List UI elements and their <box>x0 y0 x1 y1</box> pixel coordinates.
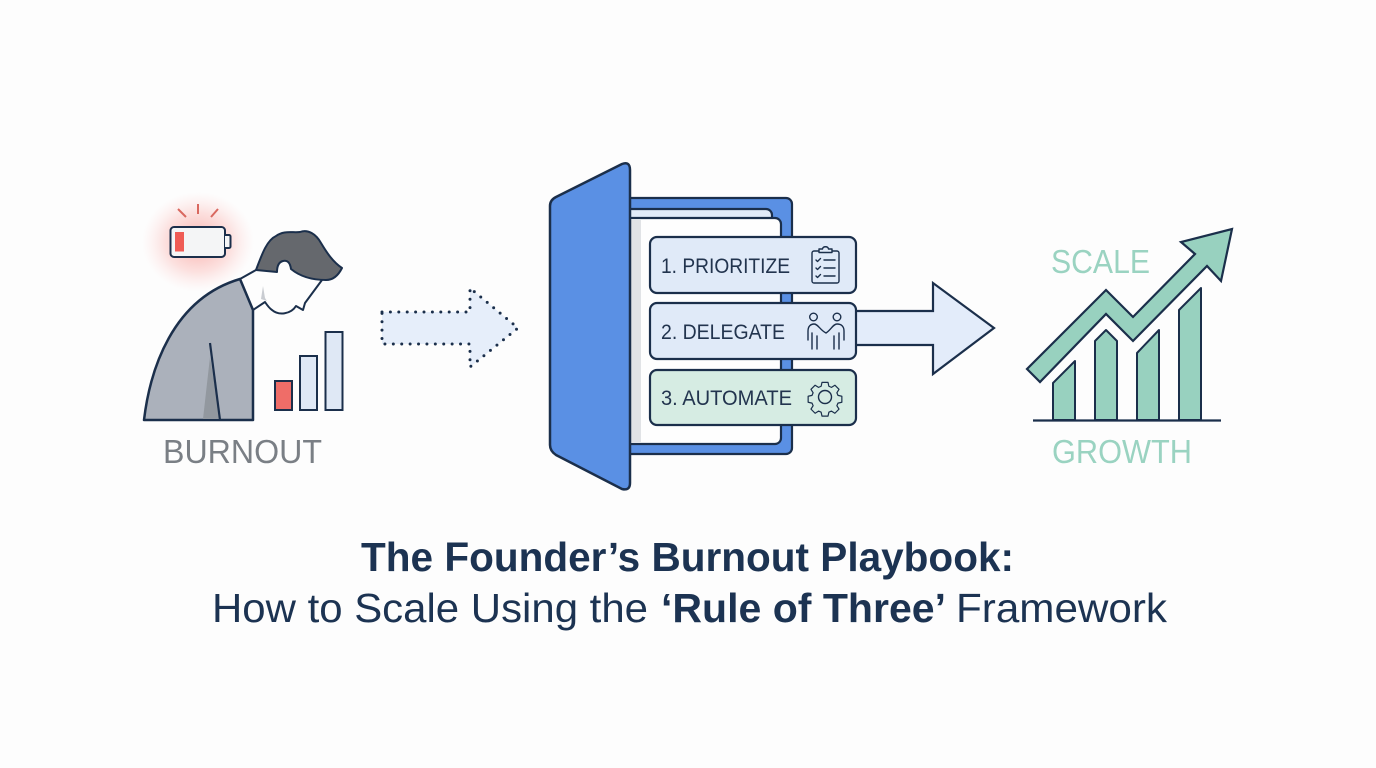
icon: exhausted founder <box>144 231 342 420</box>
arrow: playbook to growth <box>850 283 994 374</box>
card: delegate: 2. DELEGATE <box>661 321 785 344</box>
label: scale: SCALE <box>1051 243 1150 280</box>
bar chart: declining energy <box>275 332 342 410</box>
icon: low battery <box>142 192 254 292</box>
icon: handshake <box>808 313 844 349</box>
axis <box>1033 419 1221 422</box>
icon: gear <box>808 382 842 416</box>
panel: growth <box>1027 229 1232 470</box>
arrow: growth trend <box>1027 229 1232 382</box>
card: prioritize <box>650 237 856 293</box>
label: burnout: BURNOUT <box>163 433 322 470</box>
panel: burnout <box>142 192 342 470</box>
label: growth: GROWTH <box>1052 433 1192 470</box>
subtitle: Framework <box>956 585 1168 631</box>
subtitle: How to Scale Using the <box>212 585 648 631</box>
icon: checklist clipboard <box>812 247 839 283</box>
subtitle: ‘Rule of Three’ <box>661 585 946 631</box>
icon: open book <box>550 163 792 489</box>
card: automate: 3. AUTOMATE <box>661 387 792 410</box>
card: prioritize: 1. PRIORITIZE <box>661 255 790 278</box>
bar chart: rising bars <box>1053 288 1201 420</box>
arrow: dotted transition <box>382 288 518 367</box>
card: automate <box>650 370 856 425</box>
card: delegate <box>650 303 856 359</box>
title: The Founder’s Burnout Playbook: <box>361 534 1014 580</box>
subtitle <box>212 585 1168 631</box>
title <box>212 534 1168 631</box>
panel: playbook <box>550 163 856 489</box>
